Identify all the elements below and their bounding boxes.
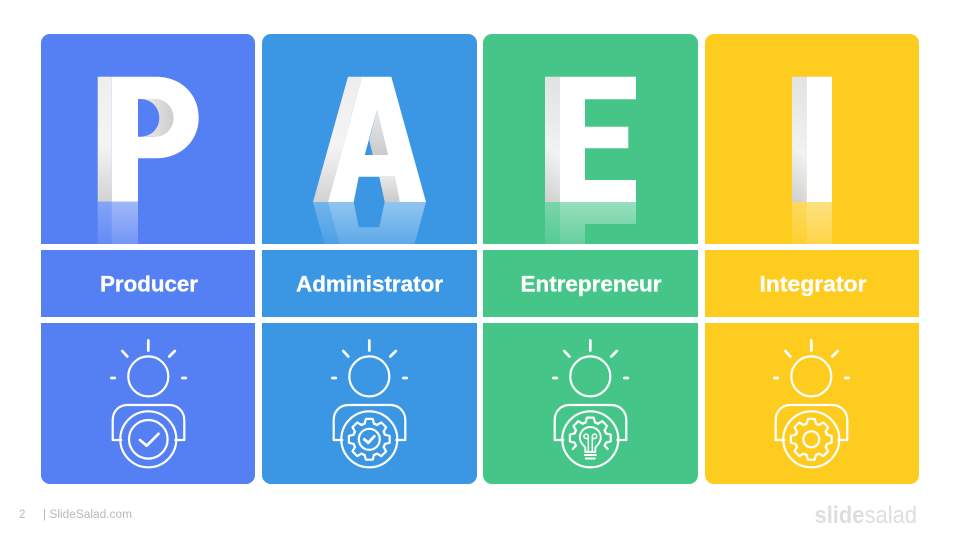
- label: Producer: Producer: [100, 272, 198, 296]
- icon: person with gear and check: [332, 340, 407, 467]
- label: Producer: [41, 250, 255, 317]
- panel: Entrepreneur icon card: [483, 323, 698, 484]
- page number: 2: [19, 509, 25, 521]
- letter P: [98, 77, 199, 244]
- letter I: [792, 77, 832, 244]
- logo: slidesalad: slidesalad: [814, 502, 917, 529]
- icon: person with gear and light bulb: [553, 340, 628, 467]
- icon: person with gear: [774, 340, 849, 467]
- panel: Producer icon card: [41, 323, 255, 484]
- label: Administrator: [262, 250, 477, 317]
- letter A: [313, 77, 426, 244]
- panel: P letter card: [41, 34, 255, 244]
- panel: E letter card: [483, 34, 698, 244]
- panel: A letter card: [262, 34, 477, 244]
- panel: Integrator icon card: [705, 323, 919, 484]
- label: Integrator: [705, 250, 919, 317]
- label: Integrator: Integrator: [760, 272, 867, 296]
- footer source text: | SlideSalad.com: [43, 509, 132, 521]
- label: Entrepreneur: [483, 250, 698, 317]
- icon: person with check badge: [111, 340, 186, 467]
- label: Administrator: Administrator: [296, 272, 443, 296]
- letter E: [545, 77, 636, 244]
- label: Entrepreneur: Entrepreneur: [520, 272, 662, 296]
- panel: I letter card: [705, 34, 919, 244]
- panel: Administrator icon card: [262, 323, 477, 484]
